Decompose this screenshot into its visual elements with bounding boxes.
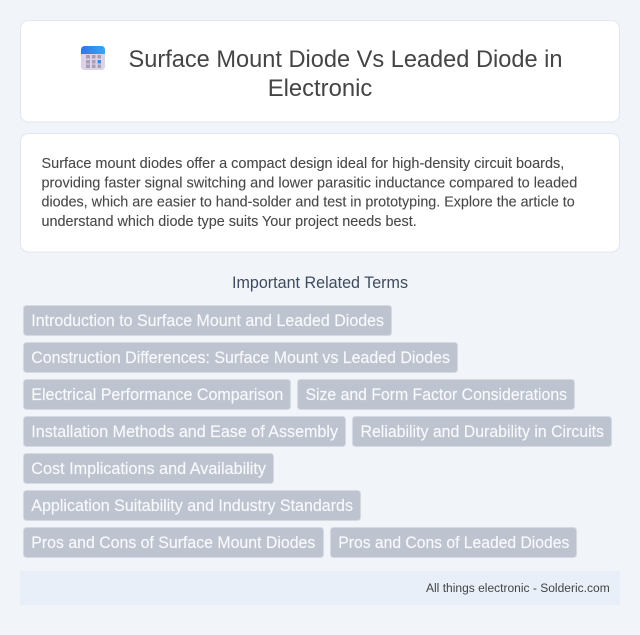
text block: summary paragraph: diodes, which are easier to hand-solder and test in prototyping. Explore the article to bbox=[42, 195, 575, 211]
tag: cost bbox=[24, 454, 274, 484]
icon: calendar bbox=[81, 46, 105, 70]
tag: electrical performance: Electrical Performance Comparison bbox=[31, 386, 283, 404]
tag: size and form factor bbox=[298, 380, 574, 410]
tag: size and form factor: Size and Form Factor Considerations bbox=[306, 386, 567, 404]
tag: introduction: Introduction to Surface Mount and Leaded Diodes bbox=[31, 312, 384, 330]
heading: important related terms: Important Related Terms bbox=[232, 274, 408, 292]
tag: pros and cons surface mount: Pros and Cons of Surface Mount Diodes bbox=[31, 534, 315, 552]
tag: installation: Installation Methods and Ease of Assembly bbox=[31, 423, 339, 441]
footer: All things electronic - Solderic.com bbox=[426, 581, 610, 595]
tag: electrical performance bbox=[24, 380, 290, 410]
tag: application bbox=[24, 490, 360, 520]
term tags bbox=[24, 306, 612, 558]
tag: pros and cons leaded bbox=[330, 528, 576, 558]
tag: installation bbox=[24, 416, 346, 446]
tag: cost: Cost Implications and Availability bbox=[31, 460, 267, 478]
text block: summary paragraph: providing faster signal switching and lower parasitic inductance compared to leaded bbox=[42, 175, 577, 191]
tag: reliability bbox=[352, 416, 612, 446]
title: Electronic bbox=[268, 75, 372, 102]
tag: application: Application Suitability and Industry Standards bbox=[31, 497, 353, 515]
text block: summary paragraph bbox=[42, 156, 577, 230]
text block: summary paragraph: Surface mount diodes offer a compact design ideal for high-density circuit boards, bbox=[42, 156, 564, 172]
tag: construction: Construction Differences: Surface Mount vs Leaded Diodes bbox=[31, 349, 450, 367]
title bbox=[128, 46, 562, 102]
title: Surface Mount Diode Vs Leaded Diode in bbox=[128, 46, 562, 73]
tag: pros and cons surface mount bbox=[24, 528, 324, 558]
footer bbox=[20, 571, 620, 605]
tag: pros and cons leaded: Pros and Cons of Leaded Diodes bbox=[338, 534, 569, 552]
text block: summary paragraph: understand which diode type suits Your project needs best. bbox=[42, 214, 417, 230]
tag: reliability: Reliability and Durability in Circuits bbox=[360, 423, 604, 441]
tag: introduction bbox=[24, 306, 392, 336]
panel: header bbox=[20, 20, 620, 122]
tag: construction bbox=[24, 342, 458, 372]
panel: summary bbox=[20, 134, 620, 252]
